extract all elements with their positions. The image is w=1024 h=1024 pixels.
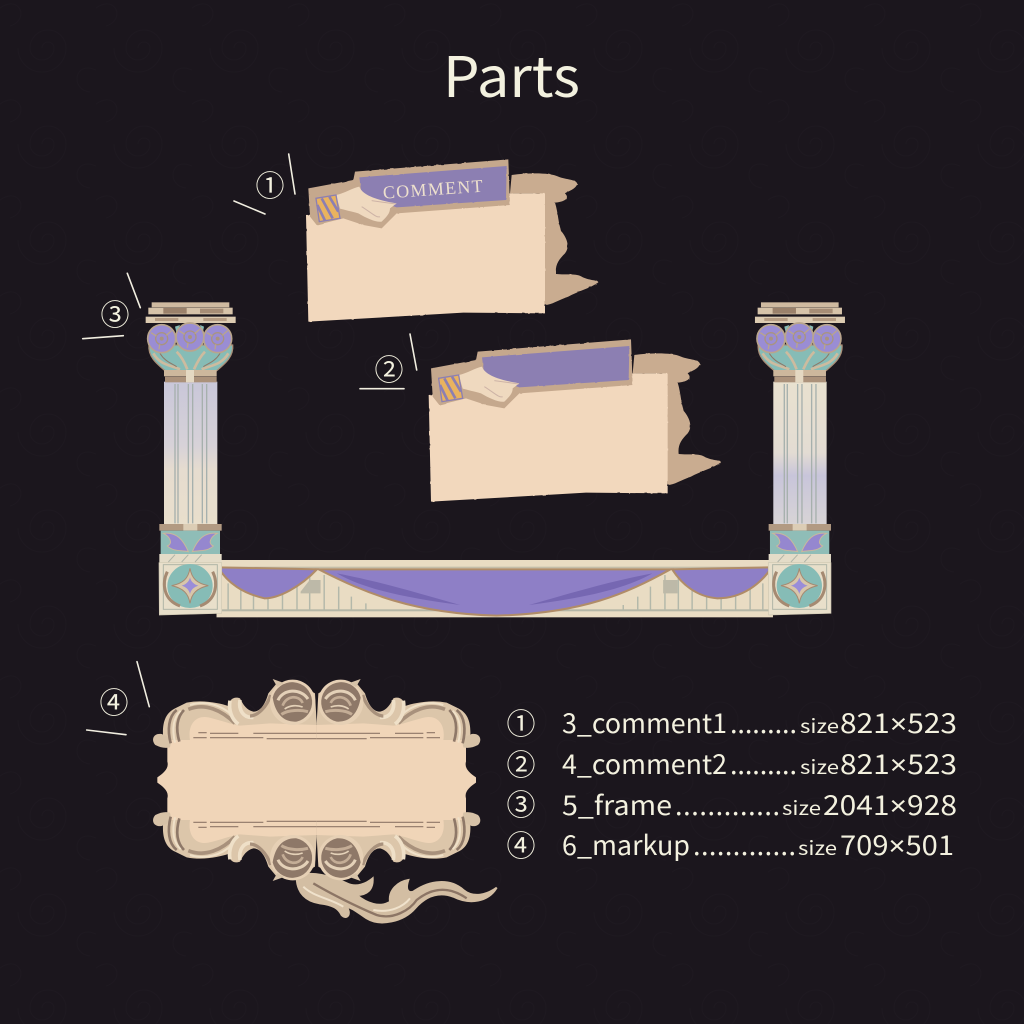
top right ornaments [317, 679, 480, 748]
central swag [319, 569, 670, 616]
row 2: ② [506, 742, 536, 784]
hand [439, 367, 519, 402]
torn paper backing [510, 173, 598, 305]
callout: number 1: ① [255, 163, 285, 205]
left column [146, 302, 236, 615]
row 1: 3_comment1 [562, 702, 727, 741]
row 2: 821×523 [840, 743, 957, 782]
row 2: size [800, 753, 839, 780]
callout: number 2 [360, 334, 417, 389]
callout: number 3 [83, 273, 140, 339]
paper sheet [429, 373, 668, 502]
row 3: 2041×928 [823, 784, 957, 823]
panel: ornate markup frame [153, 679, 497, 922]
tab border [431, 339, 633, 408]
row 3: ③ [506, 782, 536, 824]
torn paper backing [633, 353, 721, 485]
row 2: ......... [730, 743, 797, 782]
panel: column frame [146, 302, 845, 617]
row 2 [506, 742, 957, 784]
panel: comment card 1 [306, 159, 598, 322]
row 4: 6_markup [562, 824, 690, 863]
purple label [359, 166, 507, 207]
left swag [218, 567, 317, 598]
callout: number 4 [87, 662, 149, 735]
callout: number 3: ③ [100, 292, 130, 334]
row 1 [506, 701, 957, 743]
right swag [672, 567, 772, 598]
tab border [308, 159, 510, 228]
row 1: ......... [730, 702, 797, 741]
legend list [506, 701, 957, 865]
row 3: size [782, 794, 821, 821]
paper sheet [306, 193, 545, 322]
label text: COMMENT [382, 176, 483, 203]
purple label [482, 346, 629, 387]
row 4: ④ [506, 823, 536, 865]
row 1: size [800, 712, 839, 739]
bottom left ornaments [153, 812, 317, 881]
callout: number 4: ④ [99, 680, 129, 722]
row 1: 821×523 [840, 702, 957, 741]
frame body [157, 738, 476, 822]
tail flourish [297, 874, 497, 922]
row 2: 4_comment2 [562, 743, 727, 782]
beam with drapes [217, 560, 773, 617]
callout: number 2: ② [374, 347, 404, 389]
title: Parts [443, 33, 580, 114]
top left ornaments [153, 679, 317, 748]
callout: number 1 [234, 154, 295, 214]
row 4: size [798, 834, 837, 861]
row 3: ............. [675, 784, 780, 823]
panel: comment card 2 [429, 339, 721, 502]
right column [755, 302, 845, 615]
row 3: 5_frame [562, 784, 672, 823]
hand [316, 187, 397, 222]
row 4: 709×501 [840, 824, 954, 863]
row 4: ............. [693, 824, 796, 863]
bottom right ornaments [317, 812, 480, 881]
row 4 [506, 823, 954, 865]
row 1: ① [506, 701, 536, 743]
row 3 [506, 782, 957, 824]
